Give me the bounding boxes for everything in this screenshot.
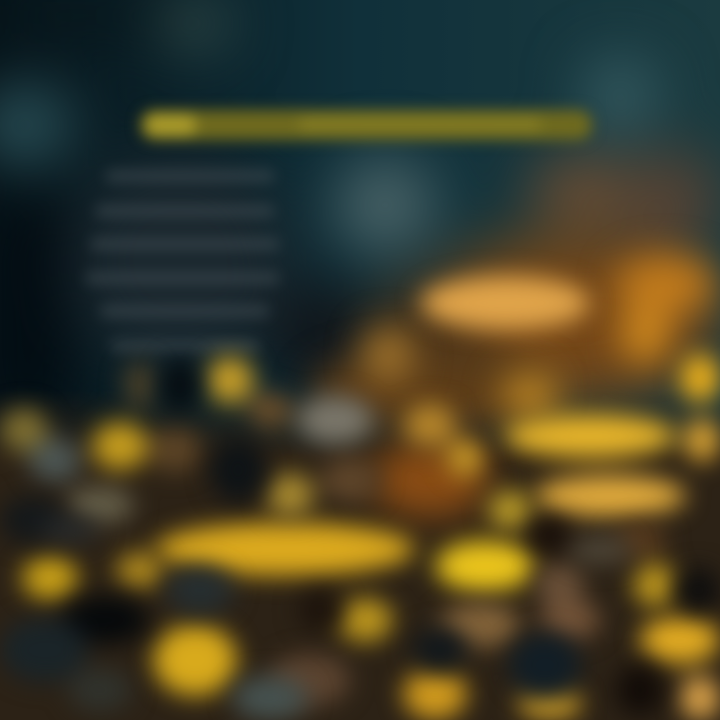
warm glow above coin field (310, 350, 550, 430)
dark gaps between coins (0, 359, 720, 720)
dark base of the coin field (0, 390, 720, 720)
dark teal backdrop shapes (0, 0, 720, 420)
large bright coins (155, 276, 720, 720)
headline band (140, 110, 592, 140)
orange coin pile, right (363, 255, 715, 518)
blurred stacked coin stripes (85, 170, 280, 352)
small gold coins (0, 356, 677, 720)
